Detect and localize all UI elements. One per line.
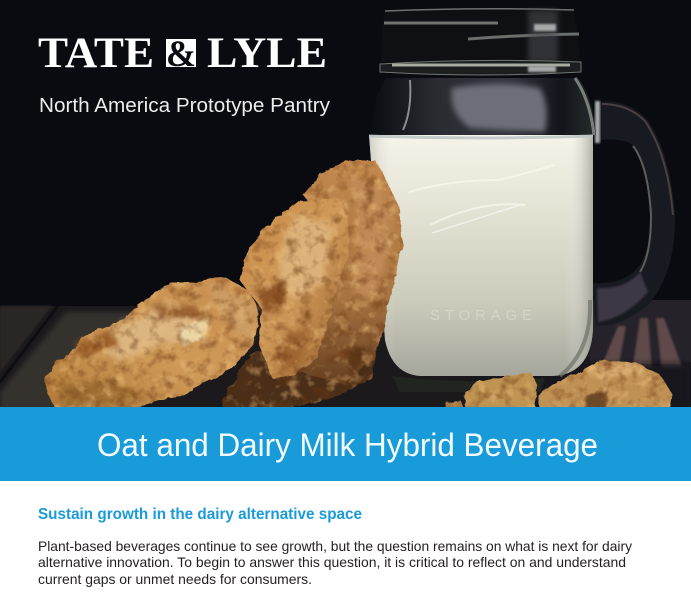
- title banner: [0, 407, 691, 481]
- banner title: Oat and Dairy Milk Hybrid Beverage: [97, 427, 598, 463]
- cookie: rear leaning: [300, 160, 402, 385]
- cookie: front tilted: [45, 277, 259, 410]
- logo: Tate & Lyle: LYLE: [207, 30, 327, 77]
- logo: Tate & Lyle: TATE: [38, 30, 154, 77]
- body text: [38, 538, 632, 587]
- jar handle: [592, 101, 675, 326]
- cookie crumbs at base: [445, 361, 673, 412]
- shadowed cookie behind: [222, 340, 378, 410]
- glass jar lid threads: [380, 8, 581, 75]
- cookie: middle leaning: [240, 198, 349, 378]
- milk in jar: [369, 135, 593, 392]
- hero photo: milk jar and cookies: [0, 0, 691, 412]
- section heading: Sustain growth in the dairy alternative space: [38, 506, 362, 523]
- body text: current gaps or unmet needs for consumers.: [38, 571, 312, 587]
- embossed jar lettering: STORAGE: [430, 307, 535, 324]
- wooden table surface: [0, 300, 691, 410]
- body text: alternative innovation. To begin to answer this question, it is critical to reflect on and understand: [38, 554, 626, 570]
- subtitle: North America Prototype Pantry: [39, 95, 330, 117]
- logo ampersand block: &: [166, 34, 196, 75]
- jar glass upper body: [370, 78, 596, 135]
- logo: Tate & Lyle: [38, 30, 327, 77]
- body text: Plant-based beverages continue to see growth, but the question remains on what is next for dairy: [38, 538, 632, 554]
